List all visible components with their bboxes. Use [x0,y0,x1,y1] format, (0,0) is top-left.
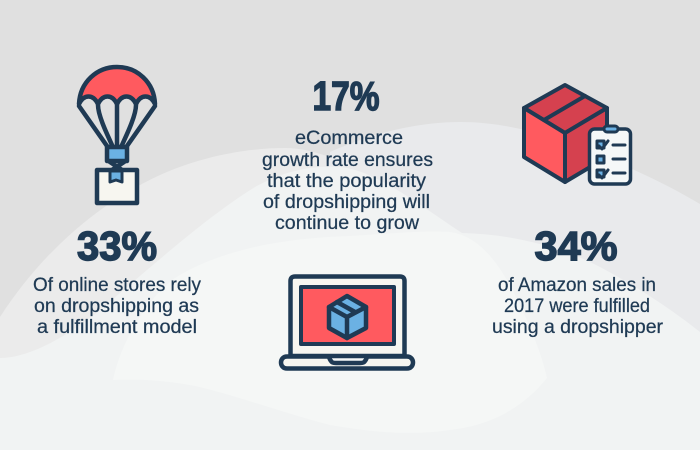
text: Amazon sales: of Amazon sales in [498,275,656,296]
text: online stores [33,275,201,338]
text: online stores: on dropshipping as [34,296,199,317]
icon: laptop [281,276,413,368]
text: eCommerce growth: growth rate ensures [262,150,433,171]
stat: 34%: 34% [534,223,618,269]
parachute crate [97,162,137,203]
text: eCommerce growth [262,128,433,234]
laptop cube [329,296,366,338]
text: eCommerce growth: that the popularity [267,171,427,192]
text: eCommerce growth: of dropshipping will [263,192,430,213]
text: eCommerce growth: eCommerce [295,128,403,149]
text: eCommerce growth: continue to grow [275,213,419,234]
clipboard [590,126,630,184]
text: online stores: Of online stores rely [33,275,201,296]
stat: 33%: 33% [77,223,157,269]
text: Amazon sales: 2017 were fulfilled [504,296,650,317]
parachute small box [107,147,127,161]
icon: box with clipboard [524,85,630,184]
icon: parachute [79,67,155,203]
stat: 17%: 17% [312,73,380,119]
text: Amazon sales: using a dropshipper [492,317,664,338]
text: Amazon sales [492,275,664,338]
text: online stores: a fulfillment model [37,317,197,338]
